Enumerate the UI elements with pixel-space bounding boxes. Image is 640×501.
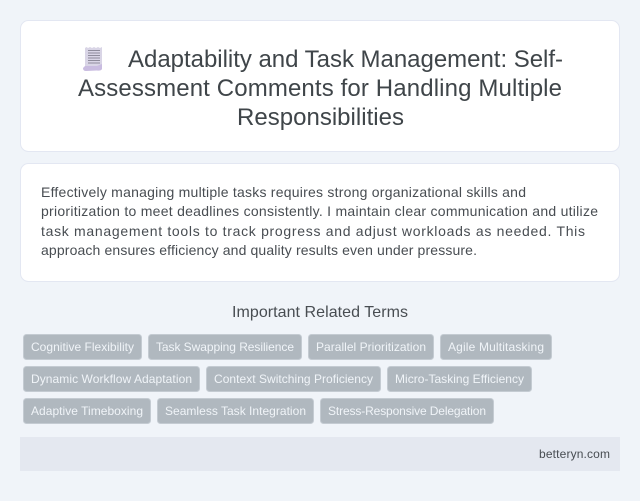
- tag: Stress-Responsive Delegation: [320, 398, 494, 424]
- text block: description: Effectively managing multiple tasks requires strong organizational skills and: [41, 184, 526, 200]
- tag: Micro-Tasking Efficiency: [388, 366, 532, 392]
- tag: Agile Multitasking: [440, 334, 552, 360]
- tag: Parallel Prioritization: Parallel Prioritization: [316, 340, 426, 354]
- tag: Task Swapping Resilience: [148, 334, 302, 360]
- tag group: related terms: [24, 334, 552, 424]
- tag: Dynamic Workflow Adaptation: Dynamic Workflow Adaptation: [31, 372, 192, 386]
- tag: Stress-Responsive Delegation: Stress-Responsive Delegation: [328, 404, 486, 418]
- text block: description: task management tools to track progress and adjust workloads as needed. This: [41, 223, 585, 239]
- icon: scroll document: [83, 47, 102, 71]
- tag: Micro-Tasking Efficiency: Micro-Tasking Efficiency: [395, 372, 524, 386]
- title: Assessment Comments for Handling Multiple: [78, 75, 562, 102]
- heading: related terms: Important Related Terms: [232, 304, 408, 321]
- tag: Agile Multitasking: Agile Multitasking: [448, 340, 544, 354]
- footer: betteryn.com: [539, 447, 610, 461]
- tag: Dynamic Workflow Adaptation: [24, 366, 200, 392]
- title: Responsibilities: [237, 104, 404, 131]
- tag: Task Swapping Resilience: Task Swapping Resilience: [156, 340, 294, 354]
- tag: Seamless Task Integration: Seamless Task Integration: [165, 404, 306, 418]
- tag: Context Switching Proficiency: [206, 366, 380, 392]
- footer: [20, 437, 620, 471]
- text block: description: approach ensures efficiency and quality results even under pressure.: [41, 242, 477, 258]
- title: [78, 46, 563, 131]
- text block: description: [41, 184, 598, 258]
- panel: title card: [20, 20, 620, 152]
- text block: description: prioritization to meet deadlines consistently. I maintain clear communication and utilize: [41, 203, 598, 219]
- tag: Cognitive Flexibility: Cognitive Flexibility: [31, 340, 134, 354]
- tag: Cognitive Flexibility: [24, 334, 142, 360]
- tag: Parallel Prioritization: [308, 334, 434, 360]
- panel: description: [20, 164, 620, 282]
- title: Adaptability and Task Management: Self-: [128, 46, 563, 73]
- tag: Seamless Task Integration: [158, 398, 314, 424]
- tag: Adaptive Timeboxing: Adaptive Timeboxing: [31, 404, 143, 418]
- tag: Context Switching Proficiency: Context Switching Proficiency: [214, 372, 373, 386]
- tag: Adaptive Timeboxing: [24, 398, 150, 424]
